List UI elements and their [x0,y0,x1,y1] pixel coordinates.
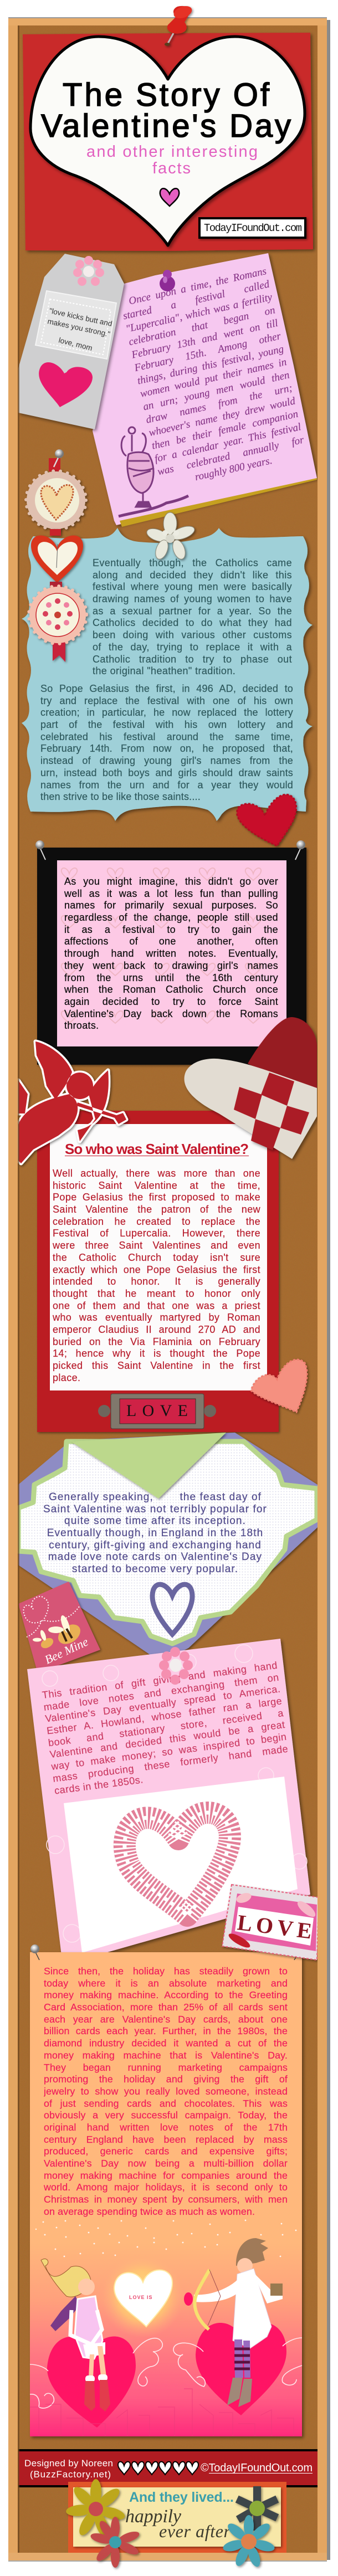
subtitle [86,143,258,177]
closing text: They began running marketing campaigns [44,2062,288,2073]
source badge [199,218,305,238]
Saint Valentine text: Festival of Lupercalia. However, there [53,1228,260,1239]
pink note text: regardless of the change, people still used [64,912,278,923]
note text: things, during this festival, young [136,343,285,387]
heading: So who was Saint Valentine: So who was Saint Valentine? [65,1141,249,1157]
pink note text: As you might imagine, this didn't go over [64,876,278,887]
tag text: "love kicks butt and [48,306,113,328]
card text: Bee Mine [43,1634,90,1667]
Saint Valentine text: were three Saint Valentines and even [53,1240,260,1251]
panel: happily ever after banner [68,2482,286,2553]
note text: book and stationary store, received a [48,1707,284,1748]
blue text 1 [93,557,292,679]
skyline [30,2389,294,2436]
icon: woven heart [184,1017,317,1159]
snow dots [35,2220,296,2257]
illustration: glowing love heart [101,2255,184,2338]
blue text 1: the original "heathen" tradition. [93,665,235,676]
designer credit: (BuzzFactory.net) [30,2469,111,2480]
Saint Valentine text: the Catholic Church today isn't sure [53,1252,260,1263]
closing text: world. Among major holidays, it is second only to [44,2182,288,2193]
blue text 2 [40,683,293,805]
LOVE label plate [98,1394,216,1429]
blue text 1: Eventually though, the Catholics came [93,557,292,568]
panel: lilac diamond envelope [18,1433,317,1662]
closing text: Valentine's Day now being a multi-billion dollar [44,2158,288,2169]
icon: peach stitched heart [251,1359,307,1412]
note text: women would put their names in [139,356,288,400]
banner text [125,2490,234,2541]
source credit: ©TodayIFoundOut.com [201,2462,313,2474]
note text: Once upon a time, the Romans [127,265,268,307]
panel: black frame with pink note [37,848,306,1065]
blue text 2: February 14th. From now on, he proposed that, [40,743,293,754]
pink note text: Valentine's Day back down the Romans [64,1008,278,1019]
closing text: money making machine that is Valentine's Day. [44,2050,288,2061]
illustration: girl [41,2259,110,2411]
banner text: ever after [159,2521,231,2541]
icon: cupid [18,1041,126,1163]
closing text: Card Association, more than 25% of all cards sent [44,2002,288,2013]
note text [119,265,309,497]
title: The Story Of [63,77,270,113]
icon: red push pin [165,4,193,46]
pink note text: from the urns until the 16th century [64,972,278,983]
blue text 1: festival where young men were basically [93,581,292,592]
tag text: makes you strong." [47,317,111,338]
icon: white flower brooch [145,512,196,561]
subtitle: and other interesting [86,143,258,161]
note text: This tradition of gift giving and making hand [42,1660,278,1701]
lilac text: Saint Valentine was not terribly popular for [43,1503,267,1515]
lilac text: quite some time after its inception. [64,1515,246,1527]
icon: red stitched heart [237,794,296,846]
blue text 2: urn, instead both boys and girls should draw saints [40,767,293,778]
Saint Valentine text: 14; hence why it is thought the Pope [53,1348,260,1359]
icon: pins on black frame [35,840,305,860]
Saint Valentine text: Well actually, there was more than one [53,1168,260,1179]
icon: small pink heart [160,188,179,206]
note text: was celebrated annually for [156,434,305,478]
blue text 1: been doing with various other customs [93,629,292,640]
closing text: money making machine. According to the Greeting [44,1989,288,2000]
closing text: money making machine for companies around the [44,2170,288,2181]
panel: orange closing panel [30,1952,302,2436]
wings [30,2338,302,2408]
Saint Valentine text: celebration he created to replace the [53,1216,260,1227]
tag text [47,306,113,352]
closing text: each year are Valentine's Day cards, about one [44,2014,288,2025]
pink note text: it as a festival to try to gain the [64,924,278,935]
panel: pink butterfly note [27,1639,310,1965]
icon: red flower [89,2517,141,2568]
blue text 2: names from the urn and for a year they would [40,779,293,790]
source badge: TodayIFoundOut.com [204,222,302,234]
note text: made love notes and exchanging them on [43,1671,280,1712]
panel: LOVE candy card: LOVE [236,1910,313,1943]
Saint Valentine text: one of them and that one was a priest [53,1300,260,1311]
panel: title felt [23,33,313,251]
icon: red heart medallion [31,529,83,583]
note text: for a calendar year. This festival [153,421,302,465]
blue text 2: then strive to be like those saints.... [40,791,201,802]
icon: silver pin and red tab [49,449,64,471]
blue text 1: Catholic tradition to try to phase out [93,654,292,665]
title [41,77,291,144]
closing text: century England have been replaced by mass [44,2134,288,2145]
icon: urn [119,427,188,516]
lilac text: Generally speaking, [49,1491,153,1503]
icon: heart outline [152,1584,192,1634]
icon: row of hearts [118,2462,198,2475]
subtitle: facts [152,160,191,177]
designer credit [24,2458,113,2480]
green flap [71,1433,226,1499]
closing text: Since then, the holiday has steadily grown to [44,1966,288,1977]
lilac text: century, gift-giving and exchanging hand [49,1540,262,1551]
note text: Valentine and decided this would be a great [49,1719,286,1761]
closing text: promoting the holiday and giving the gift of [44,2074,288,2085]
blue text 1: of the day, trying to replace it with a [93,642,292,653]
icon: pins on orange panel [30,1944,304,1960]
icon: peach heart medallion [26,471,86,530]
note text: cards in the 1850s. [54,1774,144,1796]
closing text: today where it is an absolute marketing and [44,1978,288,1989]
panel: blue scalloped note [22,528,313,846]
note text: whoever's name they drew would [148,395,296,439]
note text: way to make money; so was inspired to begin [50,1731,287,1772]
lilac text: started to become very popular. [72,1563,238,1575]
note gold underpage [120,478,317,527]
closing text: on average spending twice as much as women. [44,2206,255,2217]
note text: "Lupercalia", which was a fertility [125,291,273,335]
illustration: glowing love heart: LOVE IS [129,2295,153,2300]
icon: big bee [48,1614,84,1648]
banner text: And they lived... [129,2490,234,2505]
Saint Valentine text: picked this Saint Valentine in the first [53,1360,260,1371]
icon: lace heart [125,1813,230,1916]
pink note text: names for primarily sexual purposes. So [64,900,278,911]
closing text: jewelry to show you really loved someone, instead [44,2086,288,2097]
illustration: boy [184,2238,283,2407]
closing text: Christmas in money spent by consumers, with men [44,2194,288,2205]
note text: Esther A. Howland, whose father ran a large [46,1695,283,1737]
icon: pink flower [73,256,104,286]
blue text 2: creation; in particular, he now replaced the lottery [40,707,293,718]
closing text: produced, generic cards and expensive gifts; [44,2146,288,2157]
panel: LOVE candy card [222,1885,319,1960]
pink note text: throats. [64,1020,99,1031]
note text: Valentine's Day eventually spread to America. [44,1684,281,1725]
Saint Valentine text: Pope Gelasius the first proposed to make [53,1192,260,1203]
white inset [64,1777,298,1953]
footer band [18,2449,317,2487]
closing text: of just sending cards and chocolates. This was [44,2098,288,2109]
blue text 1: as a sexual partner for a year. So the [93,605,292,617]
Saint Valentine text: who was eventually martyred by Roman [53,1312,260,1323]
note text: then be their female companion [151,408,299,452]
closing text: billion cards each year. Further, in the 1980s, the [44,2025,288,2036]
banner text: happily [125,2506,182,2527]
pink note text: well as it was a lot less fun than pulling [64,888,278,899]
LOVE label plate: LOVE [126,1402,188,1420]
note text [42,1660,291,1800]
pink note text [64,876,278,1036]
pink note text: affections of one another, often [64,936,278,947]
closing text: original hand written love notes of the 17th [44,2122,288,2133]
flower pin [159,1647,193,1685]
tag text: love, mom [58,336,93,352]
icon: purple pin [160,270,175,291]
closing text: obviously a very successful campaign. Today, the [44,2110,288,2121]
panel: pink note [93,253,317,527]
icon: small bee [33,1629,55,1650]
Saint Valentine text: thought that he meant to honor only [53,1288,260,1299]
icon: pink heart-ring medallion [29,582,86,662]
Saint Valentine text: historic Saint Valentine at the time, [53,1180,260,1191]
panel: red frame, Saint Valentine [37,1111,279,1432]
icon: dark flower [235,2486,279,2531]
lilac text: the feast day of [180,1491,262,1503]
closing text: diamond industry decided it wanted a cut of the [44,2038,288,2049]
pink note text: when the Roman Catholic Church once [64,984,278,995]
blue text 1: Catholics decided to do what they had [93,617,292,628]
Saint Valentine text: Saint Valentine the patron of the new [53,1204,260,1215]
panel: Bee Mine card [18,1582,100,1673]
title: Valentine's Day [41,108,291,144]
Saint Valentine text: emperor Claudius II around 270 AD and [53,1324,260,1335]
illustration: heart balloons [30,2323,302,2436]
icon: felt heart [39,362,93,407]
icon: teal flower [222,2515,276,2568]
blue text 2: try and replace the festival with one of his own [40,695,293,706]
Saint Valentine text: buried on the Via Flaminia on February [53,1336,260,1347]
pink note text: they went back to drawing girl's names [64,960,278,971]
Saint Valentine text: exactly which one Pope Gelasius the first [53,1264,260,1275]
note text: an urn; young men would then [142,369,290,413]
blue text 2: So Pope Gelasius the first, in 496 AD, decided to [40,683,293,694]
title heart [30,37,305,245]
blue text 2: instead of drawing young girl's names from the [40,755,293,766]
note text: mass producing these formerly hand made [52,1743,289,1784]
blue text 1: along and decided they didn't like this [93,569,292,581]
lilac text: made love note cards on Valentine's Day [48,1551,262,1563]
blue text 2: part of the festival with his own lottery and [40,719,293,730]
note text: February 13th and went on till [130,317,279,361]
icon: yellow flower [65,2479,126,2539]
note text: February 15th. Among other [134,330,282,374]
pink note text: through hand written notes. Eventually, [64,948,278,959]
blue text 1: drawing names of young women to have [93,593,292,604]
lilac text [33,1491,277,1580]
lilac text: Eventually though, in England in the 18th [47,1527,263,1539]
panel: gift tag [18,254,124,429]
Saint Valentine text: place. [53,1372,80,1383]
note text: celebration that began on [127,304,276,348]
pink note text: again decided to try to force Saint [64,996,278,1007]
note text: draw names from the urn; [145,382,294,426]
note text: started a festival called [122,278,270,322]
Saint Valentine text [53,1168,260,1387]
note text: roughly 800 years. [194,455,273,483]
closing text [44,1966,288,2220]
Saint Valentine text: intended to honor. It is generally [53,1276,260,1287]
blue text 2: celebrated his festival around the same time, [40,731,293,742]
designer credit: Designed by Noreen [24,2458,113,2469]
